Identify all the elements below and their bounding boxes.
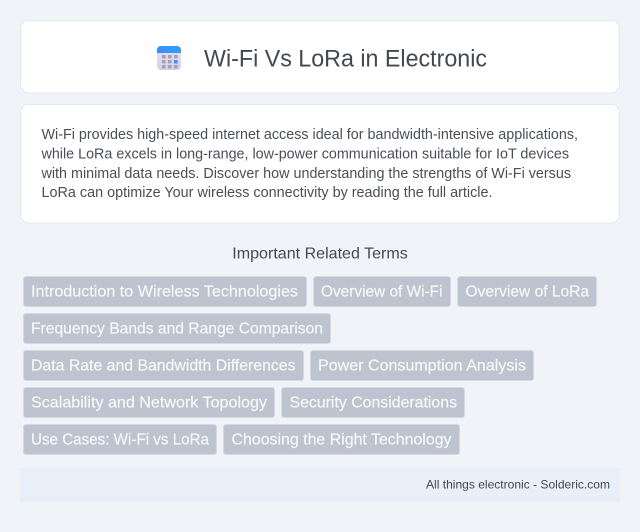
title: Wi-Fi Vs LoRa in Electronic bbox=[204, 46, 487, 72]
tag: security bbox=[282, 388, 464, 418]
tag: overview of lora: Overview of LoRa bbox=[466, 284, 589, 300]
tag: introduction to wireless technologies bbox=[24, 276, 306, 306]
tag: frequency bands: Frequency Bands and Range Comparison bbox=[31, 320, 323, 338]
tag: power consumption: Power Consumption Analysis bbox=[318, 358, 526, 374]
tag: overview of wi-fi: Overview of Wi-Fi bbox=[321, 284, 442, 300]
tag: introduction to wireless technologies: Introduction to Wireless Technologies bbox=[31, 284, 298, 300]
tag: security: Security Considerations bbox=[290, 394, 457, 412]
tag: data rate bbox=[24, 350, 304, 380]
tag: scalability bbox=[24, 388, 274, 418]
tag: frequency bands bbox=[24, 314, 330, 344]
panel: summary paragraph: with minimal data needs. Discover how understanding the strengths of Wi-Fi versus bbox=[41, 166, 571, 182]
panel: summary paragraph bbox=[20, 104, 620, 223]
tag: overview of wi-fi bbox=[314, 276, 450, 306]
panel: summary paragraph: LoRa can optimize Your wireless connectivity by reading the full article. bbox=[42, 185, 492, 201]
tag: use cases: Use Cases: Wi-Fi vs LoRa bbox=[31, 432, 209, 448]
tag: data rate: Data Rate and Bandwidth Differences bbox=[31, 358, 296, 374]
tag: choosing technology: Choosing the Right Technology bbox=[232, 432, 452, 448]
tag: overview of lora bbox=[458, 276, 596, 306]
footer: All things electronic - Solderic.com bbox=[426, 478, 610, 492]
panel: summary paragraph: Wi-Fi provides high-speed internet access ideal for bandwidth-intensive applications, bbox=[42, 127, 578, 143]
panel: summary paragraph: while LoRa excels in long-range, low-power communication suitable for IoT devices bbox=[41, 146, 569, 162]
panel: title header bbox=[20, 20, 620, 93]
tag: scalability: Scalability and Network Topology bbox=[31, 394, 267, 412]
footer bbox=[20, 468, 620, 502]
heading: important related terms: Important Related Terms bbox=[232, 246, 408, 262]
tag: power consumption bbox=[310, 350, 534, 380]
icon: calendar grid bbox=[157, 46, 181, 70]
tag: use cases bbox=[24, 424, 216, 454]
tag: choosing technology bbox=[224, 424, 460, 454]
